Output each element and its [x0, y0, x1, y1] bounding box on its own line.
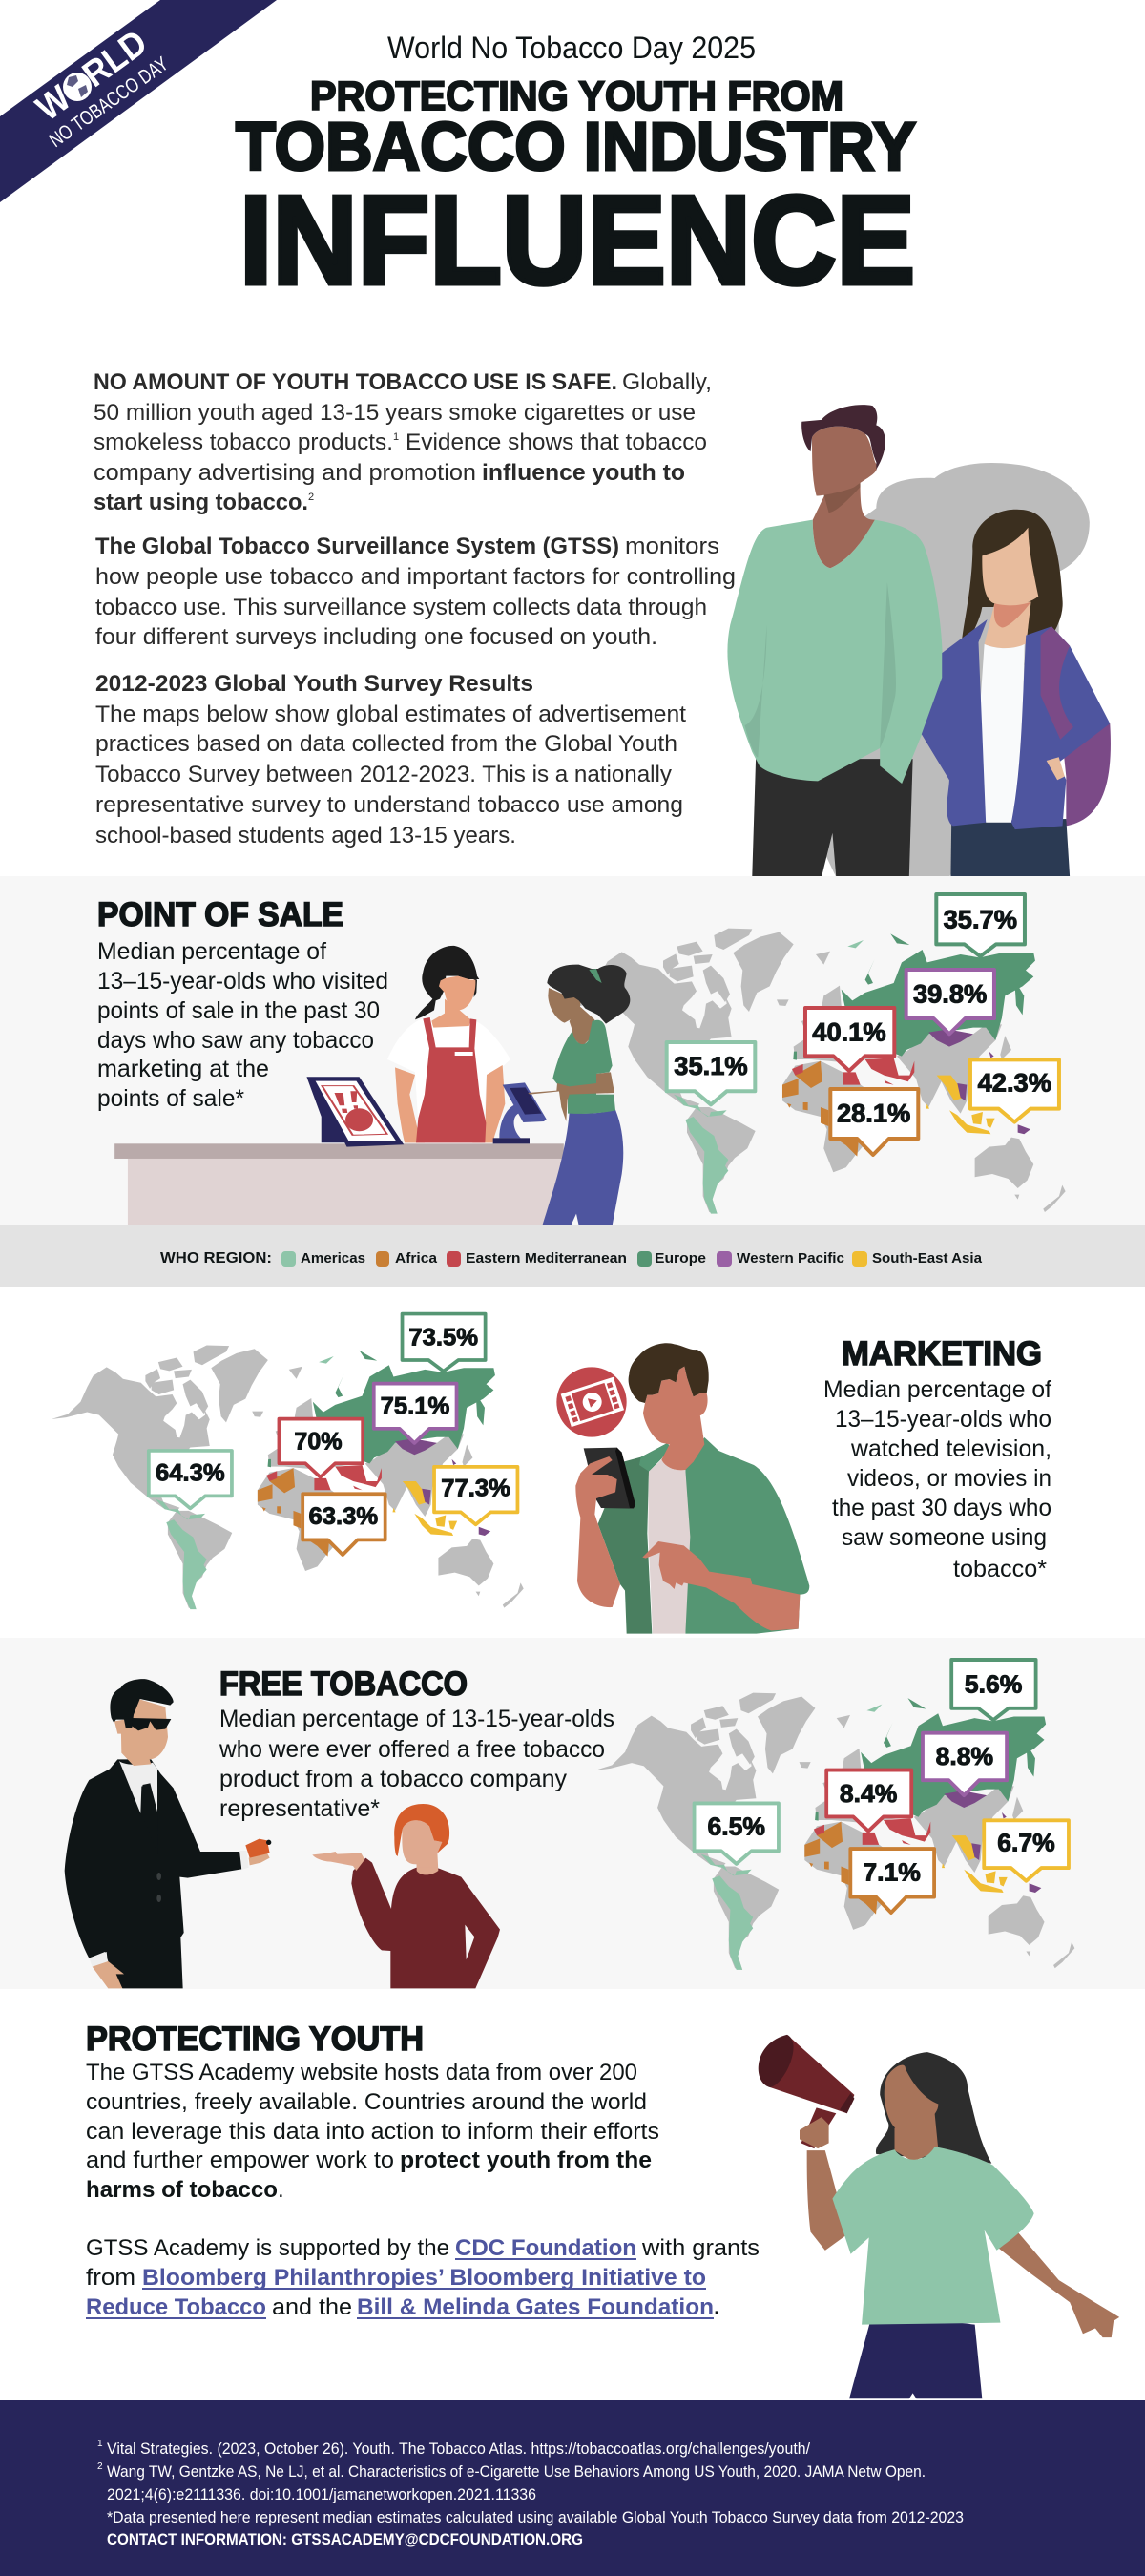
footer: references: *Data presented here represent median estimates calculated using available Global Youth Tobacco Survey data from 2012-2023	[107, 2509, 964, 2526]
text: funders with links: and the	[272, 2294, 352, 2320]
text: protecting youth: .	[278, 2177, 284, 2203]
text: marketing description	[823, 1376, 1051, 1582]
text: marketing description: saw someone using	[842, 1524, 1047, 1551]
callout: Europe 5.6%	[951, 1660, 1036, 1720]
text: point of sale description	[97, 938, 388, 1112]
text: funders with links: .	[714, 2294, 720, 2320]
legend: WHO region: Americas	[301, 1251, 365, 1267]
corner banner: World No Tobacco Day: WORLD	[30, 23, 155, 129]
text: funders with links: Bill & Melinda Gates Foundation	[357, 2294, 714, 2320]
illustration: red-haired youth being offered tobacco	[312, 1804, 500, 1988]
callout: Eastern Mediterranean 40.1%	[805, 1008, 894, 1071]
legend: WHO region: South-East Asia	[872, 1251, 983, 1267]
legend: WHO region: Europe	[655, 1251, 706, 1267]
intro text block: practices based on data collected from the Global Youth	[95, 731, 677, 757]
text: point of sale description: Median percentage of	[97, 938, 326, 965]
callout: Americas 35.1%: 35.1%	[674, 1052, 748, 1080]
text: funders with links: with grants	[641, 2235, 760, 2261]
text: protecting youth: The GTSS Academy website hosts data from over 200	[86, 2060, 637, 2085]
callout: Africa 28.1%: 28.1%	[837, 1099, 910, 1127]
heading: marketing: MARKETING	[842, 1335, 1042, 1372]
intro text block: 2012-2023 Global Youth Survey Results	[95, 671, 533, 697]
callout: Africa 63.3%	[302, 1494, 385, 1555]
text: marketing description: tobacco*	[953, 1556, 1047, 1582]
intro text block: representative survey to understand tobacco use among	[95, 792, 683, 818]
text: marketing description: the past 30 days who	[832, 1495, 1051, 1521]
intro text block: Evidence shows that tobacco	[406, 429, 707, 455]
intro text block: The Global Tobacco Surveillance System (GTSS)	[95, 534, 619, 559]
callout: Eastern Mediterranean 70%: 70%	[294, 1429, 343, 1455]
intro text block: smokeless tobacco products.	[94, 429, 393, 455]
text: point of sale description: days who saw any tobacco	[97, 1027, 374, 1054]
text: funders with links: CDC Foundation	[455, 2235, 636, 2261]
text: marketing description: 13–15-year-olds who	[835, 1406, 1051, 1433]
footer: references: 1	[97, 2439, 103, 2449]
callout: Europe 73.5%	[403, 1314, 486, 1372]
illustration: shop counter	[114, 1077, 566, 1225]
callout: Americas 6.5%: 6.5%	[708, 1813, 765, 1841]
corner banner: World No Tobacco Day	[0, 0, 277, 202]
illustration: cashier and customer	[387, 946, 630, 1225]
footer: references: Vital Strategies. (2023, October 26). Youth. The Tobacco Atlas. https://tobaccoatlas.org/challenges/youth/	[107, 2440, 810, 2458]
illustration: young man watching phone	[556, 1343, 809, 1634]
callout: Africa 7.1%: 7.1%	[863, 1859, 921, 1886]
intro text block: how people use tobacco and important factors for controlling	[95, 564, 736, 590]
heading: free tobacco: FREE TOBACCO	[219, 1665, 468, 1703]
text: protecting youth: harms of tobacco	[86, 2177, 278, 2203]
map: point of sale	[563, 894, 1066, 1214]
intro text block: monitors	[625, 534, 719, 559]
intro text block: start using tobacco.	[94, 490, 308, 515]
intro text block: 1	[393, 431, 399, 443]
illustration: woman with megaphone	[759, 2035, 1119, 2398]
footer: references: 2	[97, 2461, 103, 2472]
footer: references: 2021;4(6):e2111336. doi:10.1001/jamanetworkopen.2021.11336	[107, 2486, 536, 2503]
callout: Americas 6.5%	[695, 1803, 779, 1864]
text: point of sale description: 13–15-year-olds who visited	[97, 968, 388, 995]
callout: South-East Asia 77.3%	[434, 1467, 517, 1524]
icon: globe	[63, 73, 92, 101]
heading: point of sale: POINT OF SALE	[97, 896, 344, 933]
icon: film video badge	[556, 1367, 627, 1437]
intro text block: Tobacco Survey between 2012-2023. This is a nationally	[95, 762, 672, 787]
text: funders with links: Reduce Tobacco	[86, 2294, 266, 2320]
text: free tobacco description: who were ever offered a free tobacco	[219, 1736, 605, 1763]
callout: Western Pacific 8.8%: 8.8%	[936, 1744, 993, 1770]
map: marketing	[52, 1314, 524, 1609]
legend: WHO region: WHO REGION:	[160, 1250, 272, 1267]
icon: tobacco display sign	[306, 1077, 404, 1147]
text: funders with links: GTSS Academy is supported by the	[86, 2235, 449, 2261]
intro text block: tobacco use. This surveillance system collects data through	[95, 595, 707, 620]
text: point of sale description: points of sale*	[97, 1085, 244, 1112]
intro text block: influence youth to	[482, 460, 685, 486]
title: PROTECTING YOUTH FROM	[310, 73, 843, 119]
callout: Eastern Mediterranean 70%	[279, 1419, 363, 1477]
callout: Western Pacific 8.8%	[923, 1733, 1007, 1795]
text: protecting youth	[86, 2060, 659, 2203]
callout: Western Pacific 39.8%: 39.8%	[913, 979, 987, 1008]
callout: Eastern Mediterranean 8.4%	[826, 1770, 911, 1832]
text: protecting youth: protect youth from the	[400, 2147, 652, 2173]
text: protecting youth: countries, freely available. Countries around the world	[86, 2089, 647, 2115]
icon: megaphone	[759, 2035, 854, 2148]
intro text block: 50 million youth aged 13-15 years smoke cigarettes or use	[94, 400, 696, 426]
text: free tobacco description: representative*	[219, 1795, 380, 1822]
title: TOBACCO INDUSTRY	[236, 110, 916, 185]
intro text block: 2	[308, 492, 314, 503]
text: point of sale description: points of sale in the past 30	[97, 997, 380, 1024]
intro text block: The maps below show global estimates of advertisement	[95, 702, 686, 727]
callout: Eastern Mediterranean 40.1%: 40.1%	[812, 1017, 886, 1046]
text: funders with links	[86, 2235, 760, 2320]
title: INFLUENCE	[239, 170, 915, 310]
footer: references: Wang TW, Gentzke AS, Ne LJ, et al. Characteristics of e-Cigarette Use Behaviors Among US Youth, 2020. JAMA Netw Open.	[107, 2463, 926, 2481]
text: free tobacco description: product from a tobacco company	[219, 1766, 567, 1792]
intro text block	[94, 369, 736, 848]
callout: Americas 64.3%	[149, 1451, 232, 1508]
heading: protecting youth: PROTECTING YOUTH	[86, 2021, 424, 2058]
callout: Americas 35.1%	[667, 1042, 755, 1104]
legend: WHO region: Western Pacific	[737, 1251, 844, 1267]
text: marketing description: Median percentage of	[823, 1376, 1051, 1403]
callout: South-East Asia 77.3%: 77.3%	[441, 1476, 510, 1502]
callout: Europe 73.5%: 73.5%	[408, 1324, 478, 1351]
callout: South-East Asia 42.3%: 42.3%	[978, 1069, 1051, 1098]
illustration: two youths with smoke cloud	[727, 405, 1111, 877]
text: funders with links: Bloomberg Philanthropies’ Bloomberg Initiative to	[142, 2265, 706, 2291]
title: World No Tobacco Day 2025	[387, 31, 756, 65]
callout: Africa 7.1%	[850, 1849, 934, 1913]
footer: references: CONTACT INFORMATION: GTSSACADEMY@CDCFOUNDATION.ORG	[107, 2531, 583, 2548]
callout: South-East Asia 6.7%: 6.7%	[997, 1830, 1055, 1857]
callout: South-East Asia 42.3%	[970, 1059, 1059, 1122]
panel: free tobacco	[0, 1638, 1145, 1989]
callout: Eastern Mediterranean 8.4%: 8.4%	[840, 1781, 897, 1808]
text: marketing description: watched television,	[850, 1435, 1051, 1462]
intro text block: four different surveys including one focused on youth.	[95, 624, 657, 650]
text: free tobacco description: Median percentage of 13-15-year-olds	[219, 1706, 614, 1732]
intro text block: Globally,	[622, 369, 712, 395]
callout: Europe 5.6%: 5.6%	[965, 1671, 1022, 1698]
intro text block: school-based students aged 13-15 years.	[95, 823, 516, 848]
intro text block: company advertising and promotion	[94, 460, 476, 486]
text: protecting youth: can leverage this data into action to inform their efforts	[86, 2119, 659, 2145]
text: free tobacco description	[219, 1706, 614, 1822]
callout: Western Pacific 75.1%	[374, 1384, 457, 1443]
callout: Africa 28.1%	[830, 1089, 918, 1155]
title	[236, 31, 916, 310]
corner banner: World No Tobacco Day: NO TOBACCO DAY	[46, 52, 173, 152]
text: point of sale description: marketing at the	[97, 1056, 269, 1082]
callout: Africa 63.3%: 63.3%	[308, 1503, 378, 1530]
callout: Americas 64.3%: 64.3%	[156, 1460, 225, 1486]
illustration: tobacco representative offering product	[65, 1679, 271, 1988]
callout: Europe 35.7%	[936, 894, 1025, 956]
callout: South-East Asia 6.7%	[984, 1820, 1069, 1881]
text: marketing description: videos, or movies in	[847, 1465, 1051, 1492]
callout: Western Pacific 39.8%	[906, 970, 994, 1034]
text: protecting youth: and further empower work to	[86, 2147, 394, 2173]
legend: WHO region	[0, 1225, 1145, 1287]
legend: WHO region: Africa	[395, 1251, 438, 1267]
intro text block: NO AMOUNT OF YOUTH TOBACCO USE IS SAFE.	[94, 369, 617, 395]
legend: WHO region: Eastern Mediterranean	[466, 1251, 627, 1267]
footer: references	[0, 2400, 1145, 2576]
callout: Western Pacific 75.1%: 75.1%	[381, 1393, 449, 1419]
callout: Europe 35.7%: 35.7%	[944, 905, 1017, 933]
panel: point of sale	[0, 876, 1145, 1287]
text: funders with links: from	[86, 2265, 135, 2291]
map: free tobacco	[595, 1660, 1074, 1970]
